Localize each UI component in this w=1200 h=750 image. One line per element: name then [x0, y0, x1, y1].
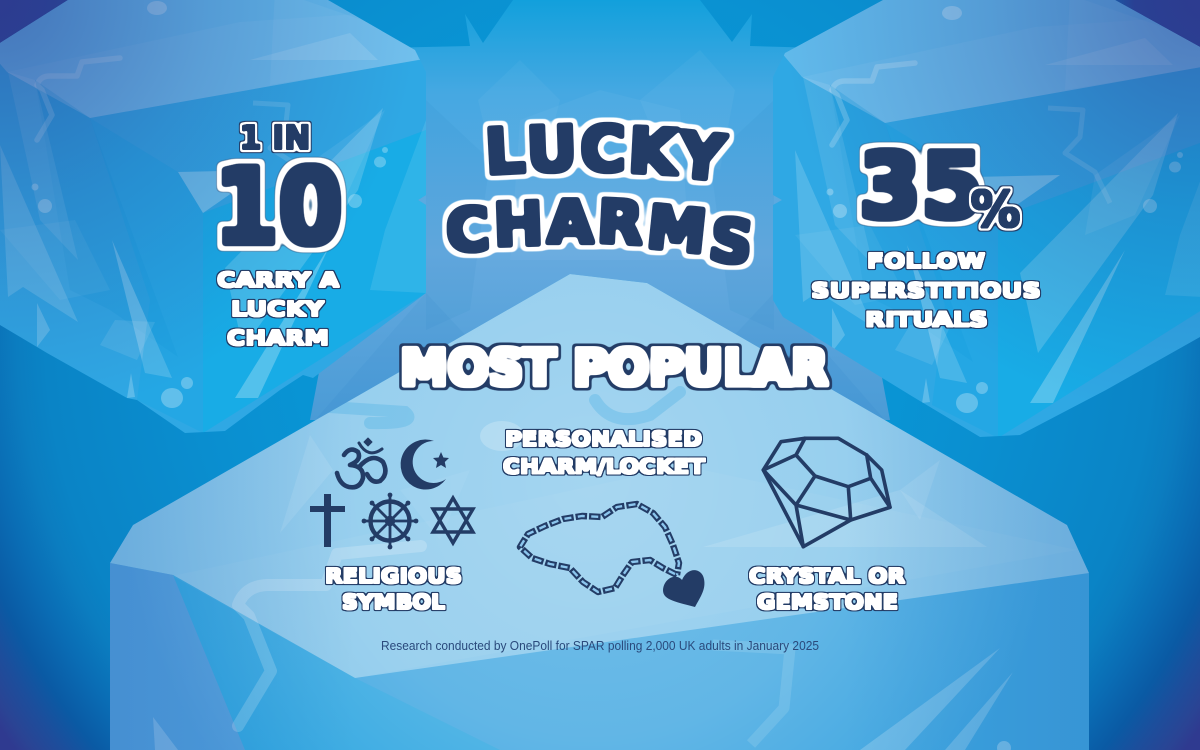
text: carry a lucky charm: LUCKY [231, 297, 325, 321]
text: follow superstitious rituals [811, 249, 1041, 332]
icon: dharma wheel [362, 493, 418, 549]
text: carry a lucky charm [217, 268, 340, 350]
heading: most popular: MOST POPULAR [400, 339, 828, 397]
10: 10 [214, 146, 342, 268]
text: religious symbol: RELIGIOUS [325, 564, 462, 588]
icon: gemstone [763, 438, 890, 547]
text: crystal or gemstone [749, 564, 905, 614]
text: personalised charm/locket: PERSONALISED [505, 427, 702, 451]
panel: left ice cube [0, 0, 440, 440]
footnote: Research conducted by OnePoll for SPAR polling 2,000 UK adults in January 2025 [381, 639, 819, 653]
text: religious symbol: SYMBOL [342, 590, 445, 614]
panel: right ice cube [770, 0, 1200, 440]
text: carry a lucky charm: CHARM [227, 326, 329, 350]
percent: % [970, 181, 1020, 239]
title [444, 112, 757, 280]
stat: 1 in 10 [214, 118, 342, 268]
text: follow superstitious rituals: FOLLOW [867, 249, 985, 273]
panel: bottom ice block [100, 270, 1100, 750]
icon: crescent and star [401, 440, 449, 490]
icon: star of david [433, 498, 473, 543]
icon: om [337, 438, 385, 487]
panel: back ice block [310, 0, 890, 420]
text: follow superstitious rituals: RITUALS [865, 308, 988, 332]
35: 35 [859, 134, 983, 239]
text: crystal or gemstone: GEMSTONE [757, 590, 898, 614]
heading: lucky: LUCKY [483, 112, 730, 196]
heading: charms: CHARMS [444, 187, 757, 280]
text: personalised charm/locket [503, 427, 705, 478]
text: follow superstitious rituals: SUPERSTITIOUS [811, 278, 1041, 302]
heart [663, 570, 704, 607]
1 in: 1 IN [240, 118, 310, 157]
text: personalised charm/locket: CHARM/LOCKET [503, 454, 705, 478]
stat: 35% [859, 134, 1020, 239]
text: carry a lucky charm: CARRY A [217, 268, 340, 292]
text: religious symbol [325, 564, 462, 614]
icon: chain and heart locket [520, 504, 704, 607]
icon: cross [310, 494, 345, 547]
text: crystal or gemstone: CRYSTAL OR [749, 564, 905, 588]
